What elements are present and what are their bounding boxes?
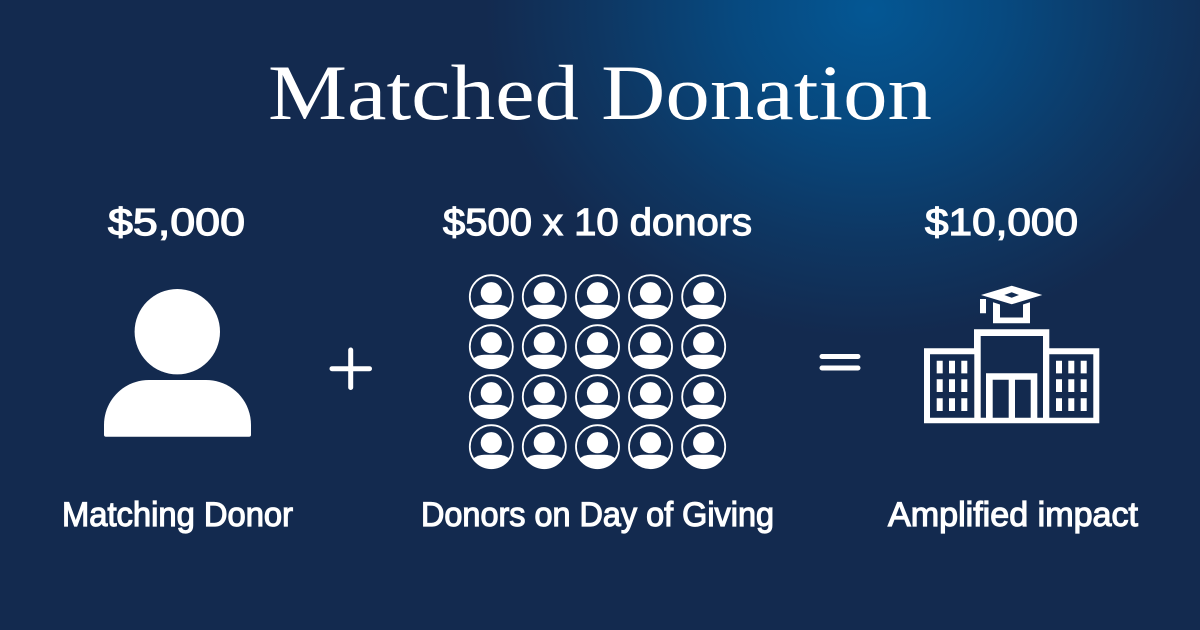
icon: single donor xyxy=(104,289,251,437)
icon: plus xyxy=(332,350,370,388)
amount: total impact: $10,000 xyxy=(925,202,1078,244)
amount: matching donor: $5,000 xyxy=(108,202,245,244)
building outline xyxy=(924,329,1099,423)
label: donors on day of giving: Donors on Day of Giving xyxy=(421,496,774,534)
title: Matched Donation xyxy=(268,49,932,136)
label: amplified impact: Amplified impact xyxy=(888,496,1139,534)
graduation cap xyxy=(980,286,1042,323)
icon grid: twenty donors xyxy=(470,275,725,468)
icon: equals xyxy=(822,356,858,368)
amount: day of giving donors: $500 x 10 donors xyxy=(443,202,752,244)
windows xyxy=(937,361,1087,411)
label: matching donor: Matching Donor xyxy=(62,496,293,534)
icon: school with graduation cap xyxy=(924,286,1099,423)
